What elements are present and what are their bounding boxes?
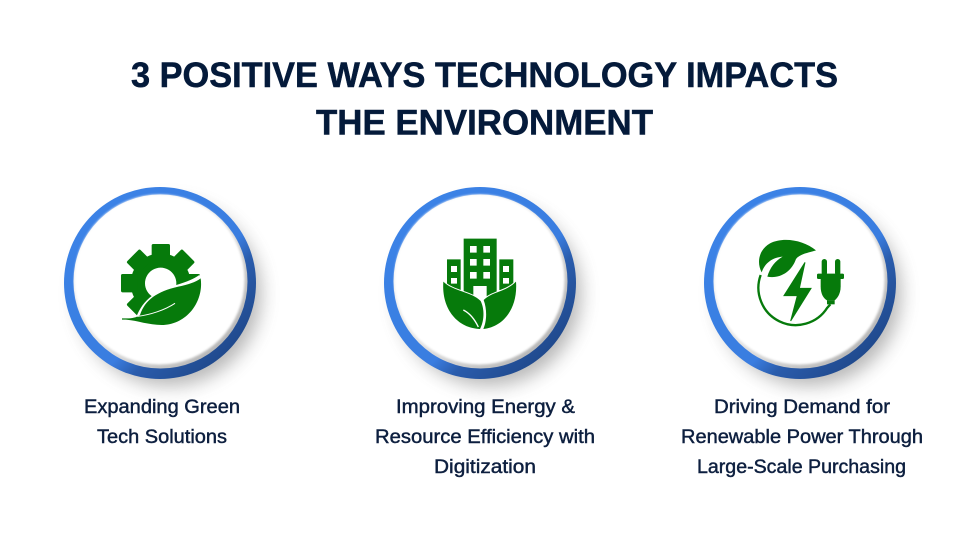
icon: city in leaves <box>443 239 516 329</box>
circle badge 2 <box>384 187 581 386</box>
caption 1 <box>84 396 240 448</box>
panel: energy efficiency <box>375 187 595 478</box>
caption 1: Expanding Green <box>84 396 240 418</box>
caption 2: Resource Efficiency with <box>375 426 595 448</box>
caption 3: Driving Demand for <box>714 396 891 418</box>
caption 2 <box>375 396 595 478</box>
caption 2: Digitization <box>434 456 536 478</box>
panel: expanding green tech <box>64 187 261 448</box>
caption 1: Tech Solutions <box>97 426 227 448</box>
icon: gear with leaf <box>121 244 208 332</box>
panel: renewable power <box>681 187 923 478</box>
icon: leaf, bolt and plug <box>758 240 844 325</box>
title <box>131 56 838 142</box>
circle badge 1 <box>64 187 261 386</box>
caption 3: Large-Scale Purchasing <box>697 456 906 478</box>
caption 3: Renewable Power Through <box>681 426 923 448</box>
circle badge 3 <box>704 187 901 386</box>
caption 3 <box>681 396 923 478</box>
caption 2: Improving Energy & <box>396 396 575 418</box>
title: 3 POSITIVE WAYS TECHNOLOGY IMPACTS <box>131 56 838 95</box>
title: THE ENVIRONMENT <box>316 104 653 142</box>
